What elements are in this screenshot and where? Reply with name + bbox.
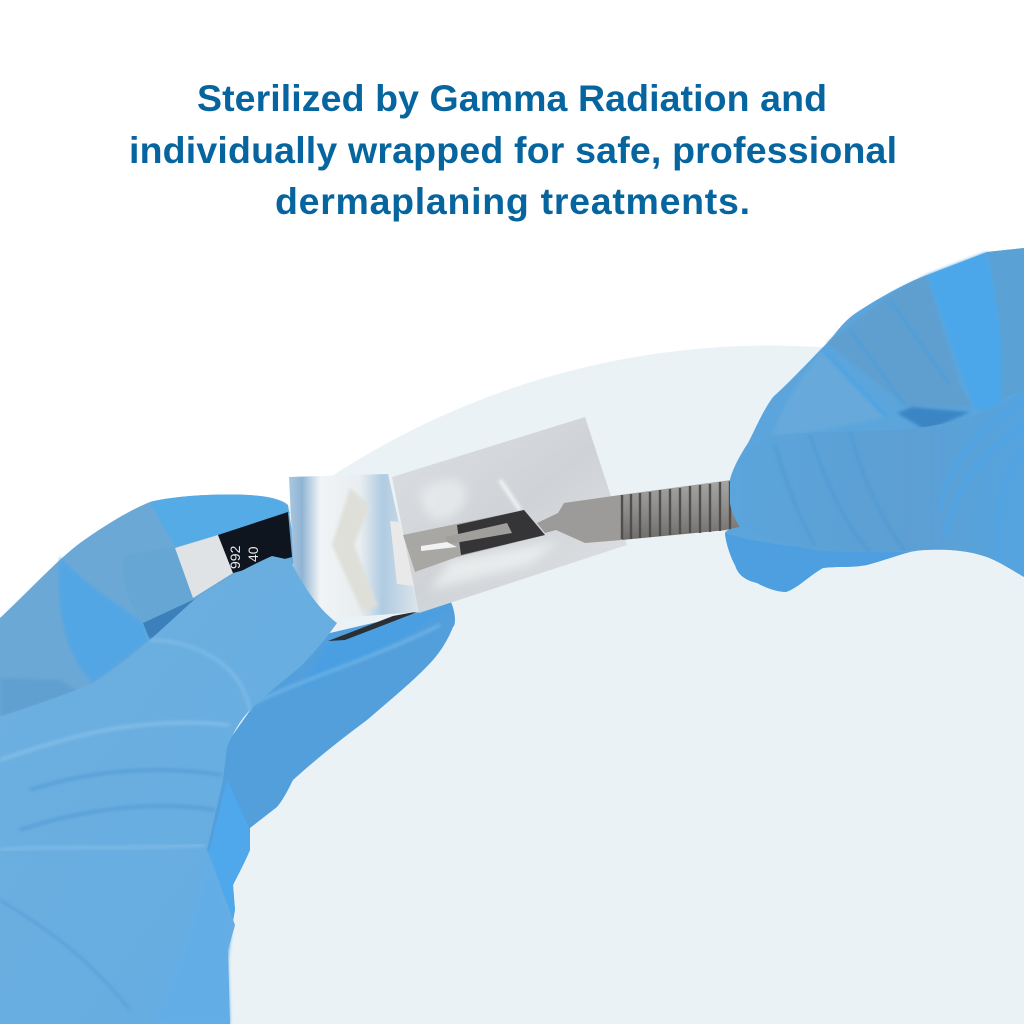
left gloved hand: back of fingers — [0, 495, 296, 720]
right gloved hand — [725, 248, 1024, 592]
left gloved hand: palm and thumb — [0, 556, 337, 1024]
blade packet label: 992 — [227, 545, 243, 569]
scalpel blade — [403, 510, 545, 572]
front foil of packet — [289, 474, 419, 621]
title: individually wrapped for safe, professional — [129, 129, 897, 171]
title: Sterilized by Gamma Radiation and — [197, 77, 827, 119]
title — [129, 77, 897, 222]
left gloved hand: lower fingers — [200, 600, 455, 950]
background circle — [0, 346, 1024, 1024]
title: dermaplaning treatments. — [275, 180, 750, 222]
blade packet label — [175, 512, 292, 598]
blade packet label: 40 — [245, 546, 261, 562]
back foil of packet — [392, 417, 627, 613]
foil sliver under packet — [328, 611, 420, 641]
scalpel handle — [537, 480, 750, 543]
